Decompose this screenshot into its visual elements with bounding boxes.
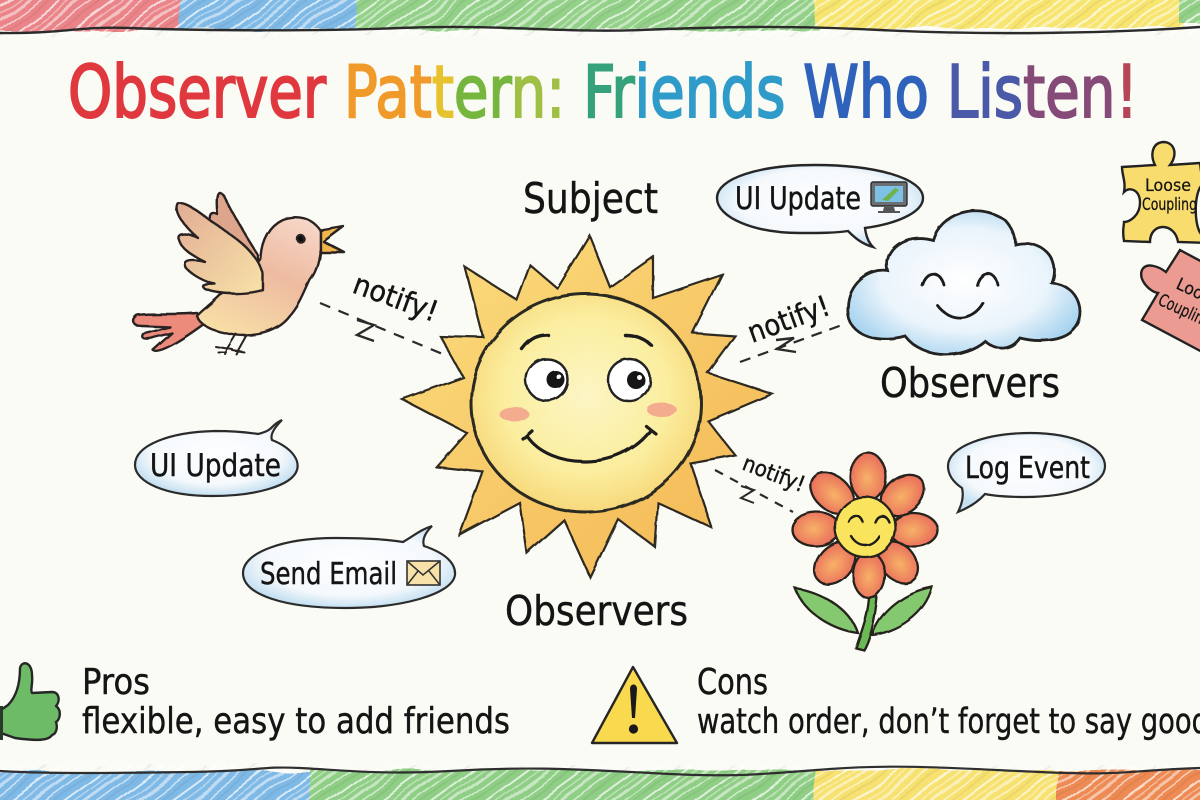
flower stem [856,597,877,650]
text: Pros: Pros [82,662,150,703]
sun smile [523,426,656,462]
sun eyebrows [522,335,652,349]
bird back wing [210,193,258,262]
sun: subject character [402,235,772,577]
sun rays [402,235,772,577]
text: Pros [82,662,510,742]
connector: flower notify [715,451,808,512]
speech bubble: UI Update top: UI Update [735,181,861,217]
flower: observer [791,453,939,650]
speech bubble: Send Email [243,526,455,608]
connector: bird notify [320,267,445,355]
bird body [197,218,320,335]
connector: cloud notify: notify! [743,289,834,350]
speech bubble: Log Event [948,433,1105,512]
bird beak [320,226,344,252]
sun eyes [526,359,650,401]
flower face [835,497,895,557]
speech bubble: UI Update left [135,420,298,496]
text: Pros: flexible, easy to add friends [82,701,510,742]
bird: observer [133,193,344,354]
speech bubble: UI Update top [717,165,923,247]
sun cheeks [499,403,677,421]
label: Observers bottom: Observers [505,587,688,635]
icon: envelope [407,561,440,585]
heading: Subject: Subject [523,174,658,223]
icon: thumbs up [0,663,60,740]
speech bubble: UI Update left: UI Update [150,448,281,484]
puzzle piece: red Loose Coupling [1141,250,1200,354]
cloud: observer [848,211,1080,355]
speech bubble: Log Event: Log Event [965,451,1090,486]
text: Cons: Cons [697,662,768,703]
text: Cons [697,662,1200,742]
puzzle piece: yellow Loose Coupling: Loose [1145,176,1191,196]
sun face disc [471,294,701,512]
bird front wing [177,203,263,294]
cloud face [922,274,998,318]
bird eye [297,235,305,243]
bird tail [133,313,205,351]
connector: flower notify: notify! [739,451,808,498]
bird legs [215,334,246,354]
crayon border: top [0,0,1200,36]
flower leaves [795,588,858,633]
icon: warning triangle [592,667,677,743]
title: Observer Pattern: Friends Who Listen! [68,50,1138,134]
speech bubble: Send Email: Send Email [260,557,397,592]
icon: monitor [871,182,907,213]
puzzle piece: yellow Loose Coupling [1122,142,1200,243]
connector: bird notify: notify! [349,267,443,329]
crayon border: bottom [0,766,1200,800]
flower petals [791,453,939,598]
label: Observers right: Observers [880,359,1060,407]
